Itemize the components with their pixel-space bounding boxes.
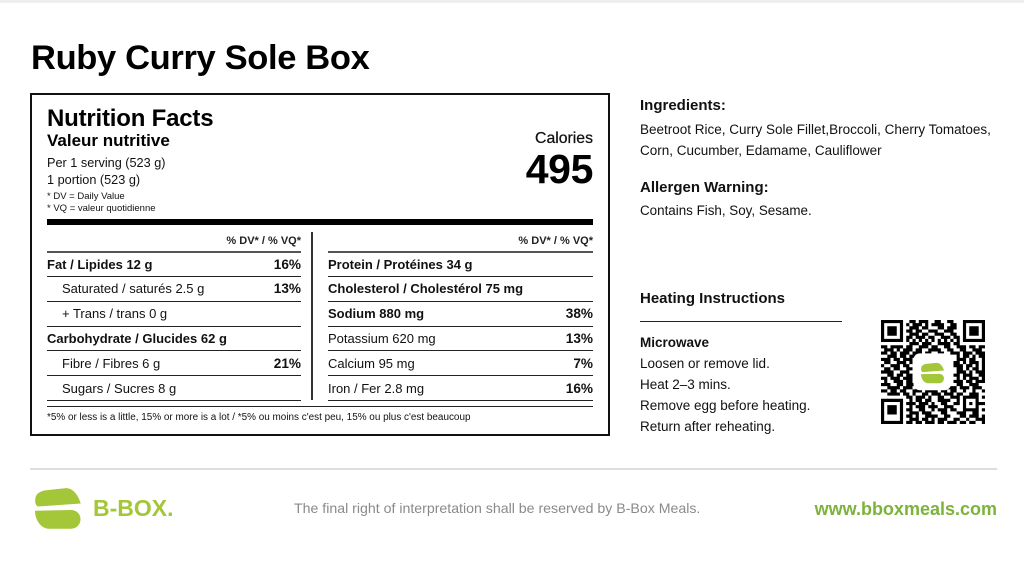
- calories value: 495: [526, 146, 593, 192]
- row: sodium: Sodium 880 mg: [328, 306, 424, 321]
- row: calcium: Calcium 95 mg: [328, 356, 415, 371]
- daily value note: * DV = Daily Value: [47, 191, 125, 202]
- ingredients text: Beetroot Rice, Curry Sole Fillet,Broccoli, Cherry Tomatoes,: [640, 122, 991, 137]
- disclaimer: The final right of interpretation shall be reserved by B-Box Meals.: [294, 500, 700, 516]
- row: saturated: Saturated / saturés 2.5 g: [62, 281, 204, 296]
- brand name: B-BOX.: [93, 495, 174, 521]
- row: fibre: Fibre / Fibres 6 g: [62, 356, 160, 371]
- row: sugars: Sugars / Sucres 8 g: [62, 381, 176, 396]
- instruction steps: [640, 356, 810, 434]
- value: fibre: 21%: [274, 356, 301, 371]
- row: trans: + Trans / trans 0 g: [62, 306, 167, 321]
- icon: QR code: [881, 320, 985, 424]
- thick divider: [47, 219, 593, 225]
- allergen text: Contains Fish, Soy, Sesame.: [640, 203, 812, 218]
- microwave instructions: [640, 335, 810, 434]
- footnote: *5% or less is a little, 15% or more is a lot / *5% ou moins c'est peu, 15% ou plus c'est beaucoup: [47, 412, 470, 423]
- row: carbohydrate: Carbohydrate / Glucides 62 g: [47, 331, 227, 346]
- panel: nutrition facts: [30, 93, 610, 436]
- instruction steps: Loosen or remove lid.: [640, 356, 770, 371]
- ingredients text: [640, 122, 991, 158]
- heading: nutrition facts: Nutrition Facts: [47, 105, 213, 132]
- heading: ingredients: Ingredients:: [640, 97, 726, 114]
- heading: heating instructions: Heating Instructions: [640, 290, 785, 307]
- icon: B-Box mark: [35, 488, 81, 529]
- value: sodium: 38%: [566, 306, 593, 321]
- portion size: 1 portion (523 g): [47, 173, 140, 187]
- column header: % DV* / % VQ*: [518, 235, 593, 247]
- value: saturated: 13%: [274, 281, 301, 296]
- calories label: Calories: [535, 130, 593, 147]
- microwave heading: Microwave: [640, 335, 709, 350]
- row: cholesterol: Cholesterol / Cholestérol 75 mg: [328, 281, 523, 296]
- instruction steps: Return after reheating.: [640, 419, 775, 434]
- row: protein: Protein / Protéines 34 g: [328, 257, 472, 272]
- brand logo: [35, 488, 174, 529]
- valeur quotidienne note: * VQ = valeur quotidienne: [47, 203, 156, 214]
- top grey strip: [0, 0, 1024, 3]
- column divider: [311, 232, 312, 400]
- instruction steps: Heat 2–3 mins.: [640, 377, 731, 392]
- title: Ruby Curry Sole Box: [31, 39, 369, 77]
- heading: valeur nutritive: Valeur nutritive: [47, 131, 170, 150]
- value: calcium: 7%: [573, 356, 593, 371]
- left column nutrients: [47, 235, 301, 401]
- website: www.bboxmeals.com: [815, 499, 997, 519]
- right column nutrients: [328, 235, 593, 401]
- row: fat: Fat / Lipides 12 g: [47, 257, 152, 272]
- heading: allergen warning: Allergen Warning:: [640, 179, 769, 196]
- row: potassium: Potassium 620 mg: [328, 331, 436, 346]
- value: potassium: 13%: [566, 331, 593, 346]
- value: fat: 16%: [274, 257, 301, 272]
- column header: % DV* / % VQ*: [226, 235, 301, 247]
- value: iron: 16%: [566, 381, 593, 396]
- row: iron: Iron / Fer 2.8 mg: [328, 381, 424, 396]
- serving size: Per 1 serving (523 g): [47, 156, 165, 170]
- instruction steps: Remove egg before heating.: [640, 398, 810, 413]
- ingredients text: Corn, Cucumber, Edamame, Cauliflower: [640, 143, 882, 158]
